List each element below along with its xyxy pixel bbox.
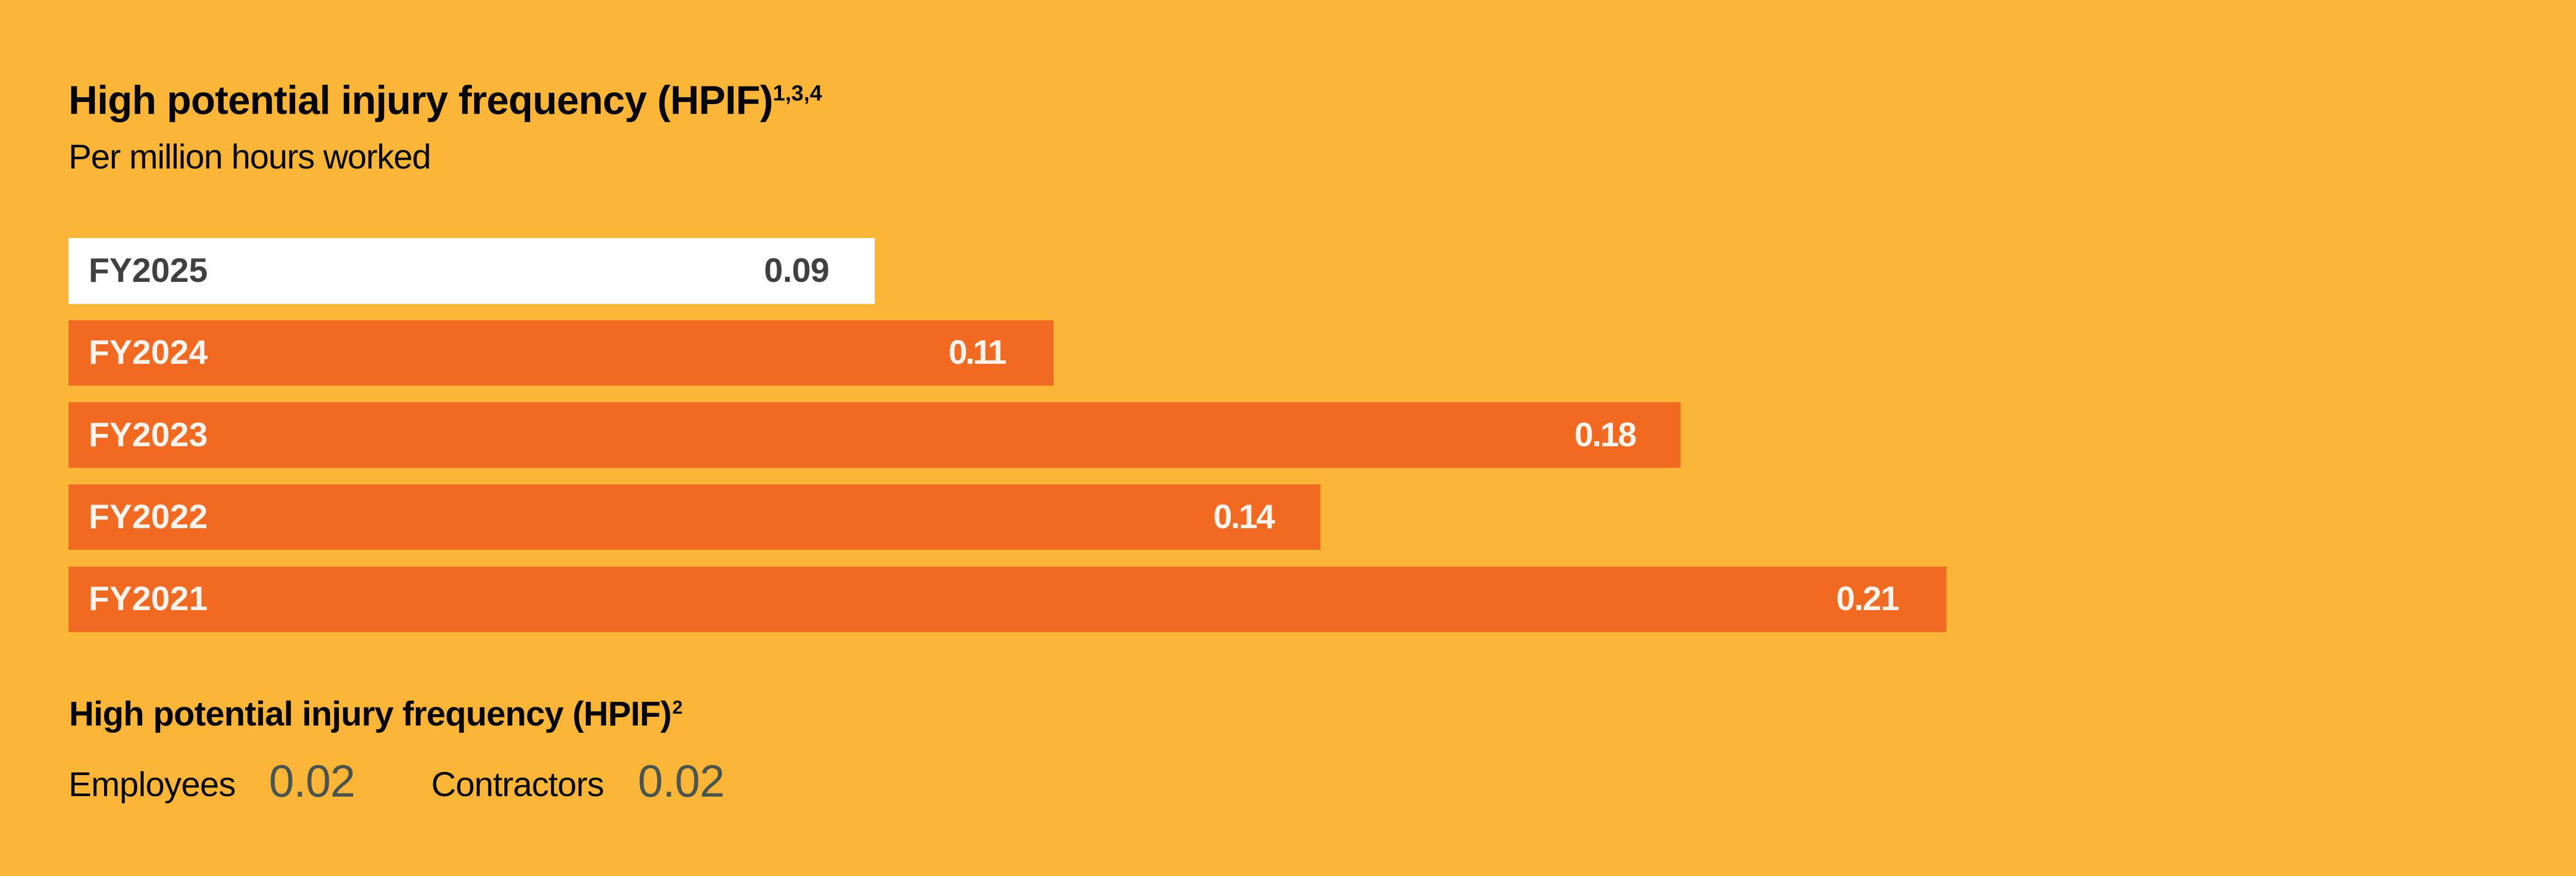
bar: FY2022 [69, 484, 1320, 550]
bar: FY2024: FY2024 [89, 333, 208, 371]
bar: FY2021: 0.21 [1836, 579, 1900, 617]
title: 1,3,4 [773, 81, 822, 106]
bar: FY2022: 0.14 [1213, 497, 1275, 535]
subheading: 2 [672, 697, 683, 718]
bar: FY2021: FY2021 [89, 579, 208, 617]
bar: FY2025: FY2025 [89, 251, 208, 289]
bar: FY2025: 0.09 [764, 251, 829, 289]
stat: contractors [431, 755, 725, 806]
stat: contractors: 0.02 [638, 755, 725, 806]
bar: FY2022: FY2022 [89, 497, 208, 535]
title: High potential injury frequency (HPIF) [69, 77, 773, 123]
stat: contractors: Contractors [431, 765, 604, 804]
subtitle: Per million hours worked [69, 138, 431, 176]
subheading: High potential injury frequency (HPIF) [69, 695, 672, 733]
bar: FY2025 [69, 238, 875, 304]
bar: FY2024 [69, 321, 1054, 385]
bar: FY2024: 0.11 [948, 333, 1007, 371]
bar: FY2021 [69, 567, 1946, 632]
bar: FY2023: 0.18 [1574, 415, 1637, 453]
stat: employees: Employees [69, 765, 236, 804]
stat: employees: 0.02 [269, 755, 355, 806]
bar: FY2023: FY2023 [89, 415, 208, 453]
stat: employees [69, 755, 355, 806]
bar chart [69, 238, 1946, 632]
bar: FY2023 [69, 402, 1681, 468]
